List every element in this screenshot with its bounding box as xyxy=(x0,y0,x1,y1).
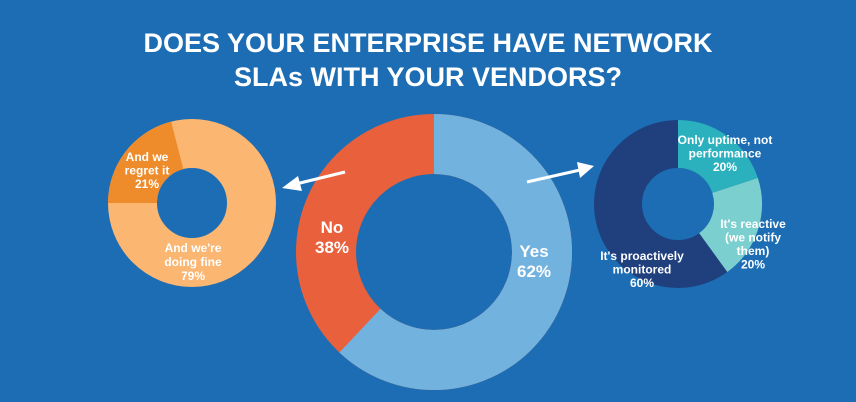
title: DOES YOUR ENTERPRISE HAVE NETWORK xyxy=(143,28,713,58)
label: proactive: It's proactively xyxy=(600,249,684,263)
label: yes: Yes xyxy=(519,242,549,261)
label: regret: regret it xyxy=(125,164,169,178)
label: uptime: performance xyxy=(689,146,762,160)
right donut chart xyxy=(600,128,786,290)
label: reactive: 20% xyxy=(741,258,765,272)
left donut chart xyxy=(125,144,252,283)
label: regret: 21% xyxy=(135,177,159,191)
label: yes: 62% xyxy=(517,262,551,281)
label: fine: And we're xyxy=(165,241,221,255)
arrow: to left donut xyxy=(282,172,345,191)
label: proactive: 60% xyxy=(630,276,654,290)
label: reactive: them) xyxy=(737,244,769,258)
main donut chart xyxy=(315,144,551,360)
title xyxy=(143,28,713,92)
arrow: to right donut xyxy=(527,162,594,182)
label: reactive: It's reactive xyxy=(720,217,786,231)
label: proactive: monitored xyxy=(613,262,671,276)
label: fine: doing fine xyxy=(164,255,222,269)
label: regret: And we xyxy=(126,150,168,164)
label: fine: 79% xyxy=(181,269,205,283)
title: SLAs WITH YOUR VENDORS? xyxy=(234,62,622,92)
label: no: 38% xyxy=(315,238,349,257)
label: uptime: 20% xyxy=(713,160,737,174)
label: reactive: (we notify xyxy=(725,230,781,244)
label: no: No xyxy=(321,218,343,237)
label: uptime: Only uptime, not xyxy=(678,133,772,147)
